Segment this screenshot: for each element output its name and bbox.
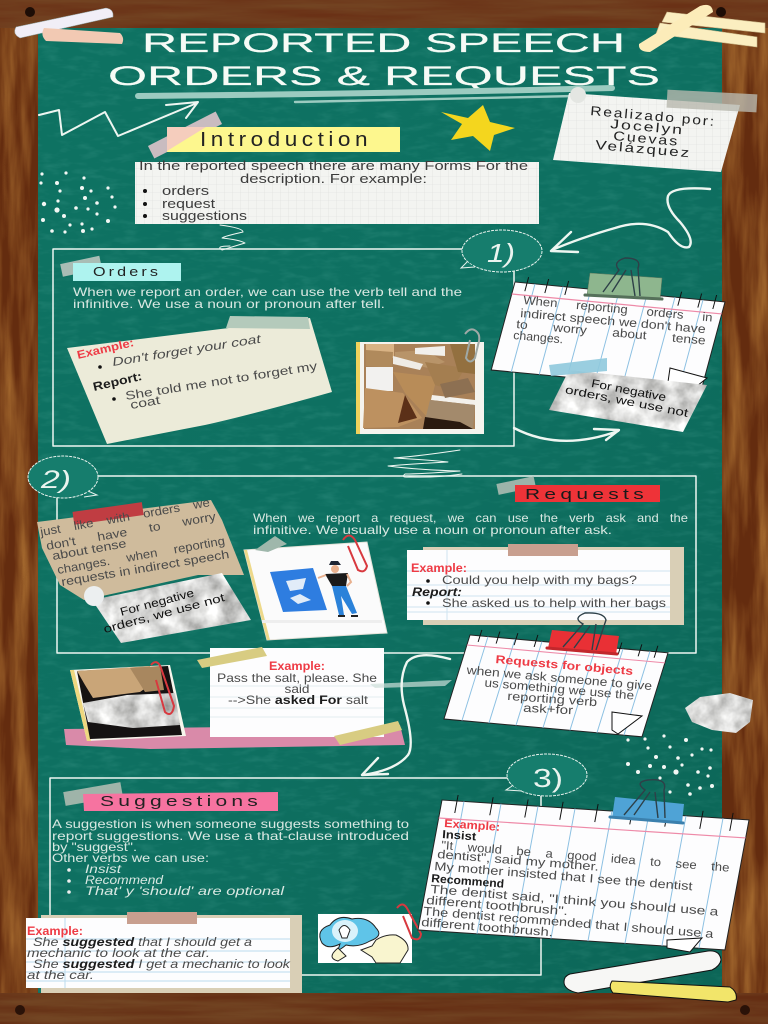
torn note: tense: requests in indirect speech — [60, 547, 230, 589]
icon: red paperclip salt — [151, 662, 174, 714]
panel: orders — [53, 230, 542, 446]
icon: chalks top right — [639, 5, 765, 52]
introduction heading: Introduction — [200, 129, 372, 151]
example note: coat — [129, 393, 162, 412]
torn note: tense: about tense — [51, 536, 128, 563]
requests body text — [253, 511, 688, 537]
suggestions body text: report suggestions. We use a that-clause introduced — [52, 829, 409, 843]
example card: salt: Pass the salt, please. She — [217, 671, 377, 685]
icon: idea heads — [318, 914, 412, 963]
example card: salt — [197, 647, 402, 745]
callout: number 2: 2) — [40, 466, 71, 494]
notebook note: example verbs: My mother insisted that I see the dentist — [434, 859, 694, 893]
notebook note: example verbs: different toothbrush". — [426, 893, 568, 918]
curved arrow to section 1 — [551, 188, 710, 252]
photo: salt — [70, 665, 186, 741]
example note: requests: She asked us to help with her bags — [442, 596, 666, 610]
suggestions heading: Suggestions — [100, 793, 262, 810]
crumpled note: negative orders: orders, we use not — [564, 384, 690, 420]
notebook note: requests for objects: us something we use the — [484, 676, 635, 703]
suggestions body text: by "suggest". — [52, 840, 137, 854]
panel: intro text: request — [162, 196, 215, 211]
curved arrow from orders — [514, 428, 619, 441]
example note: Example: — [76, 337, 135, 362]
notebook note: orders — [491, 276, 727, 390]
orders heading — [60, 256, 181, 281]
note: author: Jocelyn — [610, 116, 685, 137]
illustration card: shopping app — [244, 536, 387, 640]
squiggle — [220, 225, 245, 250]
introduction heading — [148, 112, 400, 158]
suggestions body text: A suggestion is when someone suggests something to — [52, 817, 409, 831]
icon: green binder clip — [585, 258, 662, 300]
example note: requests: Example: — [411, 563, 467, 575]
example note — [67, 316, 332, 444]
notebook note: example verbs: different toothbrush. — [421, 915, 553, 939]
example note: suggestions: at the car. — [27, 968, 94, 982]
example card: salt: said — [284, 682, 310, 696]
scribble — [388, 450, 462, 477]
example note: She told me not to forget my — [124, 359, 318, 403]
example note: requests — [407, 544, 684, 625]
notebook note: requests for objects — [444, 629, 670, 737]
example note: suggestions: Example: — [27, 926, 83, 938]
example note: requests: Report: — [412, 587, 462, 599]
requests body text: infinitive. We usually use a noun or pronoun after ask. — [253, 523, 612, 537]
decorative dots right — [626, 734, 714, 796]
example note: suggestions: She suggested I get a mechanic to look — [33, 957, 291, 971]
suggestions body text — [52, 817, 409, 898]
example card: salt: Example: — [269, 661, 325, 673]
example note: suggestions — [26, 912, 302, 993]
crumpled paper ball — [685, 693, 753, 733]
suggestions body text: Insist — [85, 862, 122, 876]
notebook note: example verbs: The dentist recommended that I should use a — [423, 904, 714, 941]
crumpled note: negative orders — [549, 358, 707, 432]
example card: salt: -->She asked For salt — [228, 693, 369, 707]
title — [108, 28, 660, 91]
callout: number 3 — [506, 754, 587, 796]
callout: number 1: 1) — [487, 238, 515, 268]
title: ORDERS & REQUESTS — [108, 61, 660, 91]
torn note: tense — [37, 495, 244, 600]
torn note: tense: don't have to worry — [45, 509, 217, 553]
icon: red paperclip idea — [397, 904, 421, 939]
crumpled note: negative orders: For negative — [590, 378, 667, 404]
notebook note: example verbs: Insist — [442, 829, 477, 843]
curved arrow to section 3 — [362, 655, 452, 775]
icon: red paperclip — [343, 536, 367, 571]
requests heading: Requests — [525, 487, 648, 503]
panel: intro text: suggestions — [162, 208, 248, 223]
suggestions heading — [63, 782, 278, 811]
example note: suggestions: She suggested that I should get a — [33, 935, 252, 949]
example note: Report: — [92, 369, 143, 394]
orders heading: Orders — [93, 264, 161, 279]
crumpled note: negative requests: orders, we use not — [102, 592, 227, 636]
notebook note: orders: to worry about tense — [516, 317, 707, 348]
panel: requests — [28, 456, 696, 653]
torn note: tense: just like with orders we — [38, 495, 211, 539]
orders body text: infinitive. We use a noun or pronoun after tell. — [73, 297, 385, 311]
suggestions body text: Recommend — [85, 873, 163, 887]
notebook note: orders: changes. — [513, 328, 564, 346]
notebook note: example verbs: Recommend — [431, 873, 504, 891]
requests body text: When we report a request, we can use the verb ask and the — [253, 511, 688, 525]
pink brush stroke — [64, 725, 405, 749]
panel: intro text — [135, 158, 539, 224]
example note: requests: Could you help with my bags? — [442, 573, 637, 587]
note: author: Realizado por: — [590, 103, 717, 129]
example note: Don't forget your coat — [111, 332, 262, 369]
notebook note: example verbs: "It would be a good idea to see the — [441, 838, 730, 875]
icon: blue binder clip — [610, 780, 684, 823]
callout: number 2 — [28, 456, 98, 498]
notebook note: requests for objects: Requests for objects — [495, 654, 634, 678]
icon: chalks bottom — [564, 951, 736, 1002]
title underline brush — [138, 88, 612, 102]
crumpled note: negative requests: For negative — [119, 587, 195, 619]
zigzag arrow — [39, 102, 198, 136]
panel: intro text: orders — [162, 183, 210, 198]
notebook note: example verbs — [418, 794, 750, 952]
callout: number 3: 3) — [533, 763, 563, 793]
note: author: Cuevas — [613, 128, 680, 149]
icon: star — [441, 105, 515, 151]
icon: chalks top left — [15, 8, 123, 44]
notebook note: example verbs: dentist", said my mother. — [437, 847, 599, 874]
panel: suggestions — [26, 754, 587, 993]
title: REPORTED SPEECH — [142, 28, 625, 58]
notebook note: requests for objects: ask+for — [523, 701, 574, 717]
orders body text: When we report an order, we can use the verb tell and the — [73, 285, 462, 299]
note: author: Velázquez — [595, 137, 692, 160]
suggestions body text: That' y 'should' are optional — [85, 884, 284, 898]
requests heading — [496, 476, 660, 503]
decorative dots left — [39, 171, 117, 234]
torn note: tense: changes. when reporting — [56, 534, 226, 577]
note: author — [553, 87, 757, 172]
notebook note: requests for objects: reporting verb — [507, 689, 598, 709]
photo: paper bags — [356, 342, 484, 434]
panel: intro text: In the reported speech there are many Forms For the — [139, 158, 528, 173]
panel: intro text: description. For example: — [240, 171, 427, 186]
crumpled note: negative requests — [84, 573, 251, 643]
notebook note: example verbs: Example: — [444, 818, 500, 834]
suggestions body text: Other verbs we can use: — [52, 851, 209, 865]
example note: suggestions: mechanic to look at the car. — [27, 946, 210, 960]
notebook note: example verbs: The dentist said, "I think you should use a — [430, 882, 719, 919]
notebook note: orders: indirect speech we don't have — [520, 306, 707, 336]
icon: paperclip grey — [465, 329, 479, 362]
notebook note: orders: When reporting orders in — [523, 293, 713, 325]
callout: number 1 — [461, 230, 542, 272]
notebook note: requests for objects: when we ask someone to give — [465, 663, 653, 693]
icon: red binder clip — [547, 613, 619, 654]
orders body text — [73, 285, 462, 311]
